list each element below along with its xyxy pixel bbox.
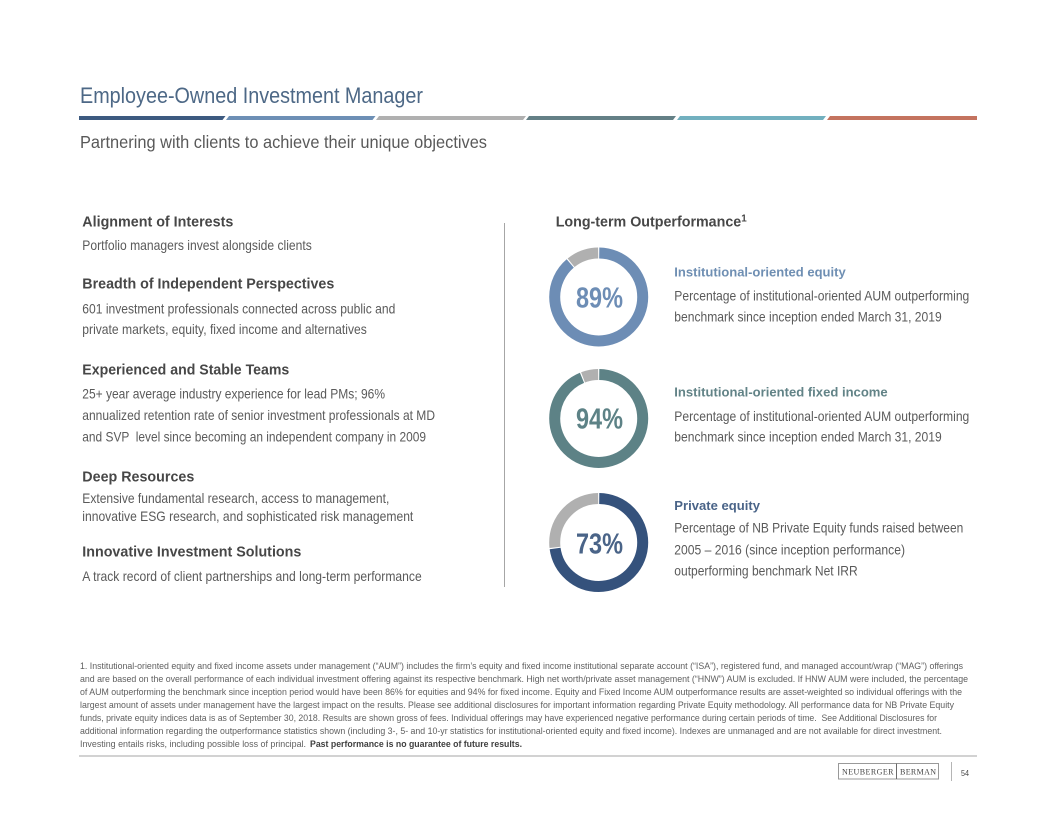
text: institutional fixed income xyxy=(674,385,969,445)
text: innovative solutions: A track record of client partnerships and long-term performance xyxy=(82,568,422,584)
panel: firm strengths xyxy=(82,215,435,584)
footnote xyxy=(80,660,968,749)
footnote: Past performance is no guarantee of future results. xyxy=(310,738,522,749)
text: institutional equity: Institutional-oriented equity xyxy=(674,265,846,280)
text: breadth of perspectives: 601 investment professionals connected across public and xyxy=(82,300,395,316)
title: Employee-Owned Investment Manager xyxy=(80,83,423,108)
text: private equity: Private equity xyxy=(674,498,761,513)
heading: innovative solutions: Innovative Investment Solutions xyxy=(82,544,301,560)
text: alignment of interests: Portfolio managers invest alongside clients xyxy=(82,237,312,253)
logo: Neuberger Berman: BERMAN xyxy=(900,768,936,776)
donut chart: 94% institutional fixed income: 94% xyxy=(576,404,623,436)
footnote: Investing entails risks, including possible loss of principal. xyxy=(80,738,306,749)
heading: deep resources: Deep Resources xyxy=(82,470,194,486)
text: institutional equity xyxy=(674,265,969,325)
text: private equity: outperforming benchmark Net IRR xyxy=(674,563,858,579)
text: experienced teams: annualized retention rate of senior investment professionals at MD xyxy=(82,407,435,423)
logo: Neuberger Berman: NEUBERGER xyxy=(842,768,894,776)
text: institutional equity: benchmark since inception ended March 31, 2019 xyxy=(674,309,942,325)
heading: breadth of perspectives: Breadth of Independent Perspectives xyxy=(82,277,334,293)
text: private equity: Percentage of NB Private Equity funds raised between xyxy=(674,520,963,536)
donut chart: 89% institutional equity: 89% xyxy=(576,282,623,314)
footnote: largest amount of assets under management have the largest impact on the results. Please see additional disclosures for important information regarding Private Equity methodology. All performance data for NB Private Equity xyxy=(80,699,954,710)
heading: alignment of interests: Alignment of Interests xyxy=(82,215,233,231)
text: deep resources xyxy=(82,490,413,524)
text: experienced teams: and SVP level since becoming an independent company in 2009 xyxy=(82,429,426,445)
page number: 54 xyxy=(961,768,969,778)
donut chart: 89% institutional equity xyxy=(555,253,643,341)
footnote: additional information regarding the outperformance statistics shown (including 3-, 5- and 10-yr statistics for institutional-oriented equity and fixed income). Indexes are unmanaged and are not available for direct investment. xyxy=(80,725,942,736)
text: deep resources: innovative ESG research, and sophisticated risk management xyxy=(82,508,413,524)
footnote: 1. Institutional-oriented equity and fixed income assets under management (“AUM”) includes the firm’s equity and fixed income institutional separate account (“ISA”), registered fund, and managed account/wrap (“MAG”) offerings xyxy=(80,660,963,671)
donut chart: 73% private equity: 73% xyxy=(576,528,623,560)
text: breadth of perspectives: private markets, equity, fixed income and alternatives xyxy=(82,321,367,337)
heading: long-term outperformance: Long-term Outperformance xyxy=(556,215,744,231)
footnote: and are based on the overall performance of each individual investment offering against its respective benchmark. High net worth/private asset management (“HNW”) AUM is excluded. If HNW AUM were included, the percentage xyxy=(80,673,968,684)
subtitle: Partnering with clients to achieve their unique objectives xyxy=(80,132,487,152)
text: breadth of perspectives xyxy=(82,300,395,337)
text: private equity: 2005 – 2016 (since inception performance) xyxy=(674,541,905,557)
text: institutional fixed income: benchmark since inception ended March 31, 2019 xyxy=(674,429,942,445)
header colour bar xyxy=(79,116,977,120)
text: experienced teams: 25+ year average industry experience for lead PMs; 96% xyxy=(82,386,385,402)
donut chart: 73% private equity xyxy=(555,498,643,586)
donut chart: 94% institutional fixed income xyxy=(555,374,643,462)
logo: Neuberger Berman xyxy=(838,764,938,779)
text: institutional equity: Percentage of institutional-oriented AUM outperforming xyxy=(674,288,969,304)
text: experienced teams xyxy=(82,386,435,445)
footnote: of AUM outperforming the benchmark since inception period would have been 86% for equities and 94% for fixed income. Equity and Fixed Income AUM outperformance results are asset-weighted so individual offerings with the xyxy=(80,686,962,697)
text: deep resources: Extensive fundamental research, access to management, xyxy=(82,490,389,506)
footnote: funds, private equity indices data is as of September 30, 2018. Results are shown gross of fees. Individual offerings may have experienced negative performance during certain periods of time. See Additional Disclosures for xyxy=(80,712,937,723)
heading: long-term outperformance: 1 xyxy=(741,214,747,225)
text: private equity xyxy=(674,498,963,579)
panel: long-term outperformance xyxy=(555,214,969,586)
text: institutional fixed income: Percentage of institutional-oriented AUM outperforming xyxy=(674,408,969,424)
heading: experienced teams: Experienced and Stable Teams xyxy=(82,363,289,379)
text: institutional fixed income: Institutional-oriented fixed income xyxy=(674,385,888,400)
